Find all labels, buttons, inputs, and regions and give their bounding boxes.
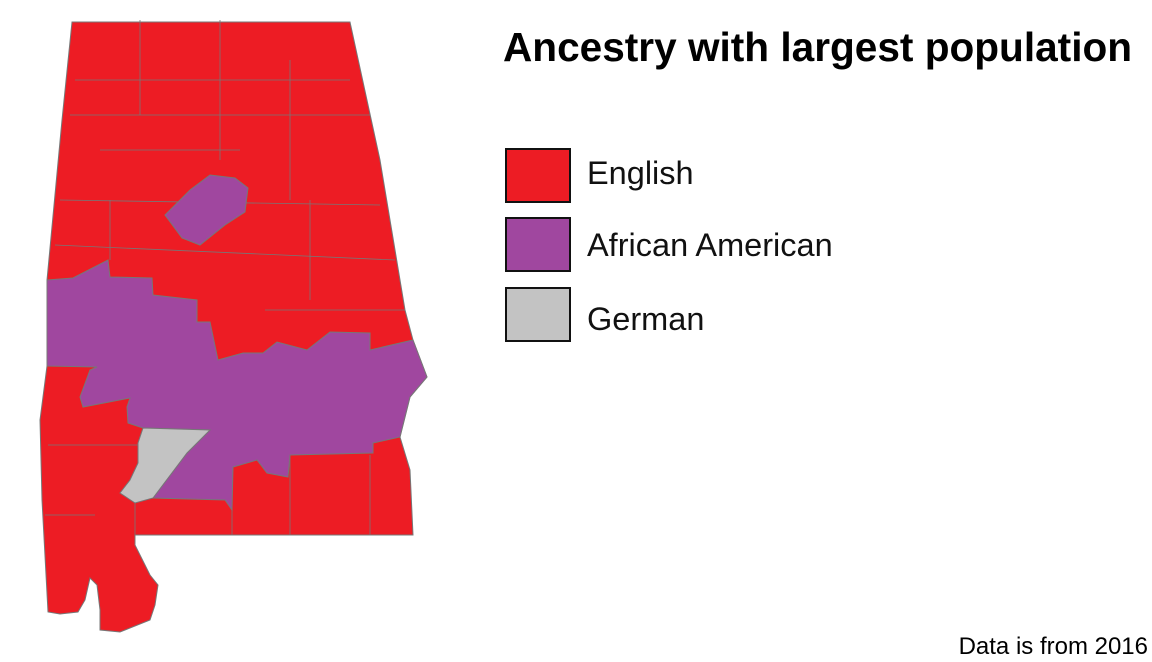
legend item: African American: [505, 217, 833, 272]
footer source note: Data is from 2016: [959, 633, 1148, 660]
region: English (state base): [40, 22, 427, 632]
legend: German: [587, 301, 704, 337]
legend item: German: [505, 287, 704, 342]
region: German: [120, 428, 210, 503]
legend: [505, 148, 833, 342]
region: African American: [47, 260, 427, 510]
region: African American (Jefferson): [165, 175, 248, 245]
map: Alabama counties: [40, 20, 428, 632]
legend item: English: [505, 148, 694, 203]
title: Ancestry with largest population: [503, 24, 1132, 70]
legend: African American: [587, 227, 833, 263]
legend: English: [587, 155, 694, 191]
